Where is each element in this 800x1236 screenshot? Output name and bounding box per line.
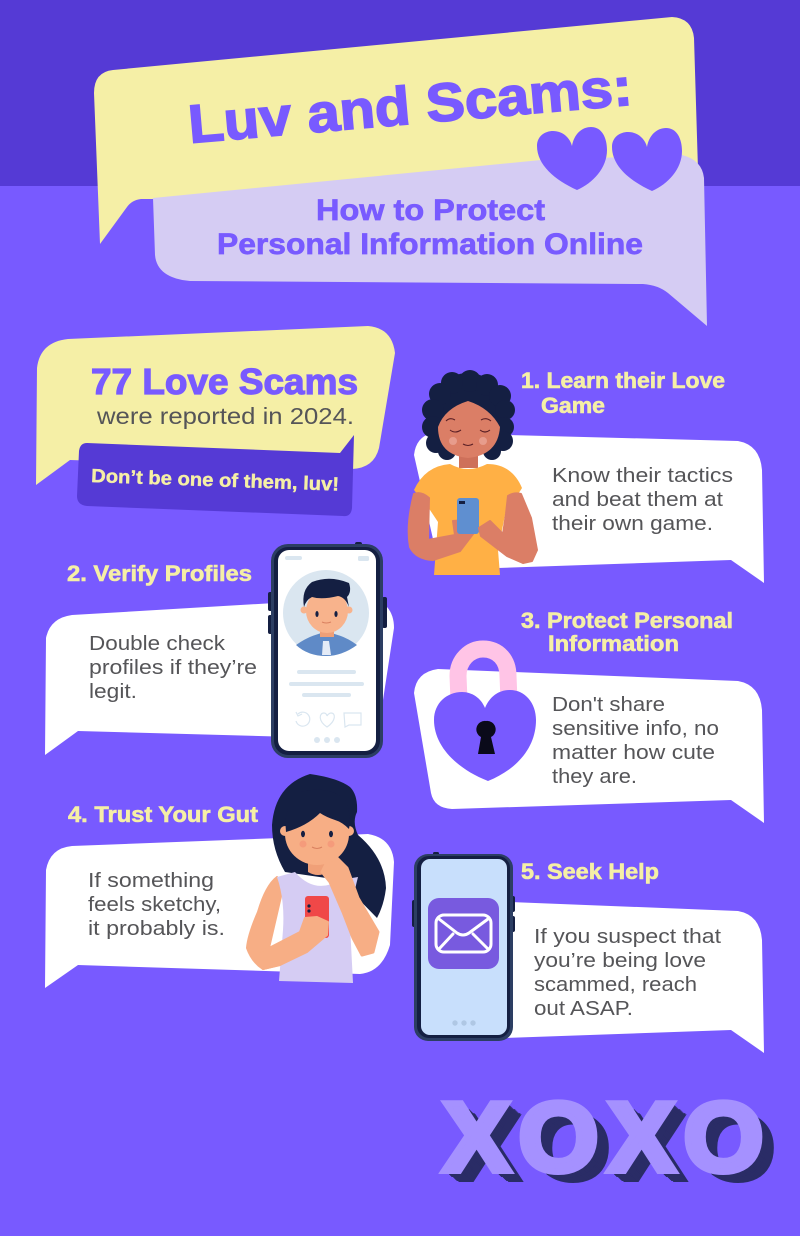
body text: Know their tactics [552, 464, 733, 487]
yellow stat bubble [36, 326, 395, 485]
xoxo sign-off: O [518, 1082, 599, 1192]
heading: 5. Seek Help [521, 859, 659, 884]
heading: Game [541, 393, 605, 418]
panel: 1 learn their love game [409, 368, 764, 583]
body text: Double check [89, 632, 226, 655]
speech bubble [45, 834, 394, 988]
xoxo sign-off [438, 1082, 774, 1192]
body text: out ASAP. [534, 997, 633, 1020]
stat text: were reported in 2024. [96, 403, 354, 429]
body text: it probably is. [88, 917, 225, 940]
yellow title bubble [94, 17, 698, 244]
subtitle: Personal Information Online [217, 228, 643, 261]
body text: matter how cute [552, 741, 715, 764]
stat heading: 77 Love Scams [91, 361, 358, 402]
subtitle: How to Protect [316, 194, 545, 227]
header speech bubbles [94, 17, 707, 326]
speech bubble [505, 902, 764, 1053]
callout text: Don’t be one of them, luv! [91, 466, 339, 496]
panel: 5 seek help [412, 852, 764, 1053]
illustration: phone with envelope [412, 852, 515, 1041]
panel: 77 love scams [36, 326, 395, 516]
xoxo sign-off: O [683, 1082, 764, 1192]
body text: Don't share [552, 693, 665, 716]
body text: scammed, reach [534, 973, 697, 996]
panel: 3 protect personal information [414, 608, 764, 823]
icon: left heart [537, 127, 607, 190]
body text: feels sketchy, [88, 893, 221, 916]
body text: they are. [552, 765, 637, 788]
speech bubble [45, 603, 394, 755]
body text: you’re being love [534, 949, 706, 972]
heading: 1. Learn their Love [521, 368, 725, 393]
lilac subtitle bubble [153, 155, 707, 326]
dark callout bubble [77, 435, 354, 516]
xoxo sign-off: X [608, 1082, 675, 1192]
heading: Information [548, 631, 679, 656]
header dark band [0, 0, 800, 186]
speech bubble [414, 669, 764, 823]
speech bubble [414, 433, 764, 583]
panel: 4 trust your gut [45, 774, 394, 988]
body text: legit. [89, 680, 137, 703]
body text: If you suspect that [534, 925, 721, 948]
illustration: woman thinking [247, 774, 386, 983]
body text: sensitive info, no [552, 717, 719, 740]
illustration: phone profile [268, 542, 387, 758]
body text: their own game. [552, 512, 713, 535]
body text: profiles if they’re [89, 656, 257, 679]
icon: right heart [612, 128, 682, 191]
title: Luv and Scams: [186, 57, 634, 155]
heading: 3. Protect Personal [521, 608, 733, 633]
icon: heart padlock [434, 649, 536, 781]
body text: If something [88, 869, 214, 892]
heading: 2. Verify Profiles [67, 561, 252, 586]
body text: and beat them at [552, 488, 723, 511]
panel: 2 verify profiles [45, 542, 394, 758]
heading: 4. Trust Your Gut [68, 802, 259, 827]
illustration: woman with phone [409, 370, 537, 575]
xoxo sign-off: X [443, 1082, 510, 1192]
